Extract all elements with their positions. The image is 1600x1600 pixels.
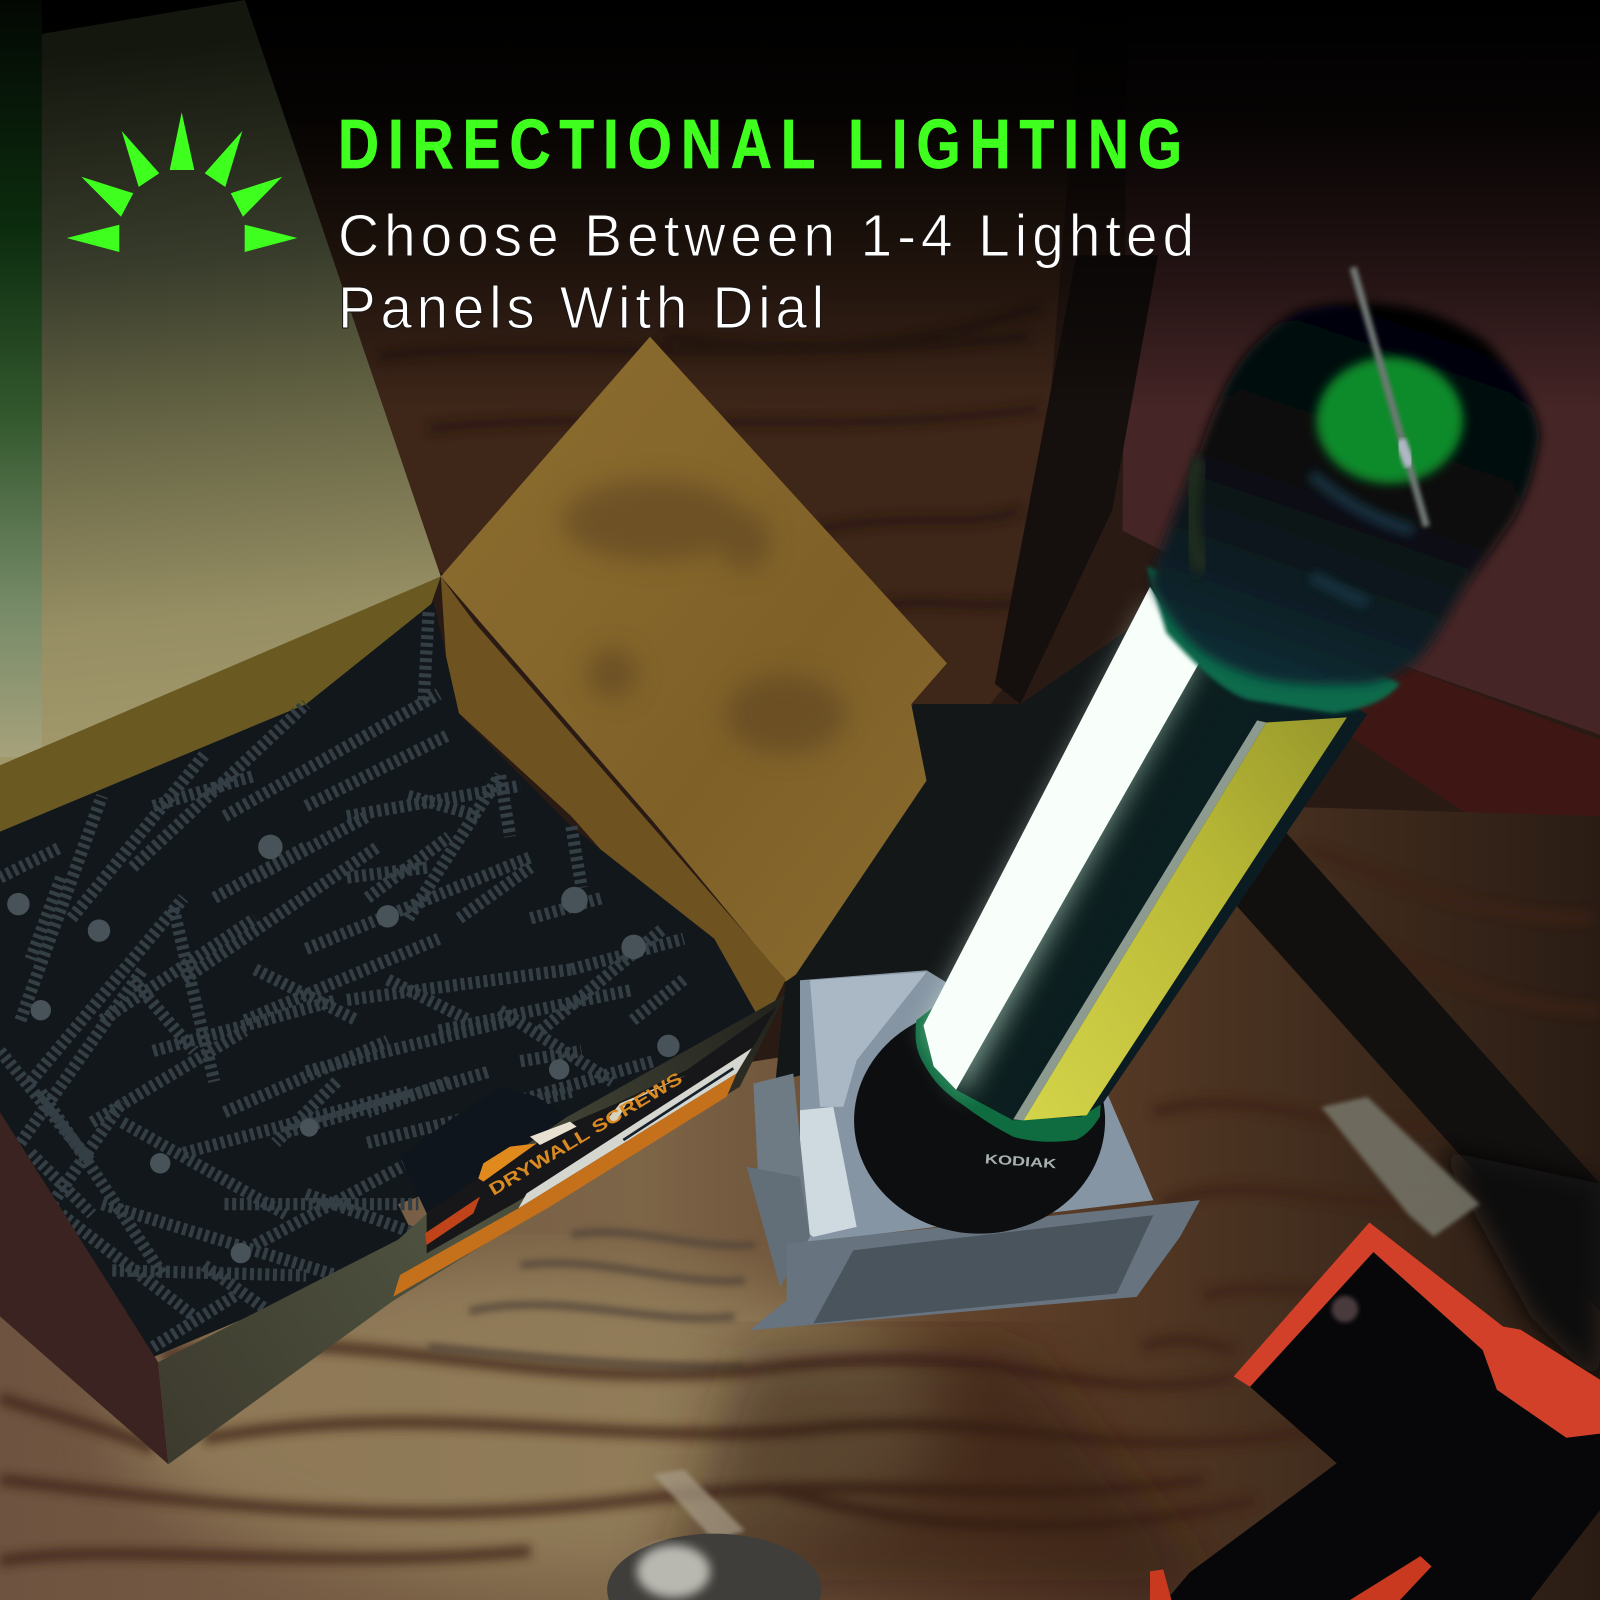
white lit panel <box>923 587 1199 1090</box>
subtitle: Panels With Dial <box>338 275 829 341</box>
box printed label <box>393 1007 777 1297</box>
tool red trim <box>1234 1222 1600 1438</box>
flap stains <box>561 480 847 755</box>
grey grain near box <box>429 1232 755 1367</box>
dark area right of tool <box>1440 1150 1600 1388</box>
wire highlight <box>1400 440 1410 466</box>
red wall right <box>1122 0 1600 735</box>
torn black flap <box>400 1087 567 1213</box>
brand label: KODIAK <box>984 1151 1057 1171</box>
dark shelf right <box>1316 653 1600 867</box>
green end cap <box>1316 357 1463 484</box>
orange lower band <box>393 1073 737 1297</box>
red logo <box>425 1197 480 1245</box>
panel: junction box stand <box>747 970 1200 1330</box>
wood panel behind box <box>245 0 1082 796</box>
torch base <box>854 1007 1105 1234</box>
red lower clip <box>1350 1556 1432 1600</box>
stand side bracket <box>753 1074 810 1237</box>
torch head <box>1150 303 1540 685</box>
yellow panel <box>1023 717 1347 1120</box>
box flap <box>441 337 947 982</box>
green base ring <box>916 980 1102 1142</box>
stand bright strip <box>800 1107 857 1237</box>
stand front recess <box>813 1215 1153 1324</box>
head blue sheen <box>1311 474 1413 602</box>
panel: cardboard box <box>0 0 947 1464</box>
box front face <box>158 995 786 1464</box>
lit wood glow <box>122 1265 939 1571</box>
screw heads <box>7 835 680 1263</box>
box front left side <box>0 1112 168 1464</box>
dark shadow beside torch stand <box>663 1347 1224 1600</box>
dark rail right <box>1230 827 1600 1311</box>
tool body <box>1166 1252 1600 1600</box>
stand front rim <box>750 1200 1200 1330</box>
label text: DRYWALL SCREWS <box>485 1068 686 1199</box>
black band <box>427 1007 777 1253</box>
pale scuff on wood <box>1321 1097 1480 1237</box>
top vignette <box>0 0 1600 408</box>
icon: directional light rays <box>67 112 297 252</box>
icon: drill chuck <box>607 1534 821 1600</box>
black band line <box>623 1068 733 1140</box>
stand bright column <box>810 972 927 1107</box>
wood floor <box>0 806 1600 1600</box>
green collar <box>1147 566 1400 713</box>
icon: power tool <box>1150 1222 1600 1600</box>
box lid <box>0 0 441 776</box>
tool bolt <box>1332 1296 1358 1322</box>
silver edge <box>1013 720 1266 1120</box>
box interior <box>0 602 760 1357</box>
panel grain <box>378 306 1041 612</box>
dark post behind torch <box>995 255 1158 704</box>
green side strip <box>0 0 42 757</box>
screw pile <box>0 612 684 1347</box>
torch body <box>923 587 1367 1120</box>
panel: work light <box>854 267 1540 1234</box>
wood grain <box>0 847 1600 1561</box>
white paper tear <box>530 1122 577 1145</box>
orange tear <box>478 1143 537 1182</box>
subtitle: Choose Between 1-4 Lighted <box>338 203 1199 269</box>
head olive rim <box>1190 459 1204 571</box>
hook wire <box>1353 267 1427 527</box>
title: DIRECTIONAL LIGHTING <box>338 105 1191 183</box>
stand top plate <box>800 970 1153 1244</box>
white band <box>518 1048 752 1208</box>
stained box wall <box>0 577 441 842</box>
dark space left of torch <box>776 612 1265 1082</box>
pale scuff bottom <box>653 1469 745 1541</box>
subtitle <box>338 203 1199 341</box>
torch glow <box>923 602 1199 1097</box>
inner wall <box>441 577 786 1031</box>
